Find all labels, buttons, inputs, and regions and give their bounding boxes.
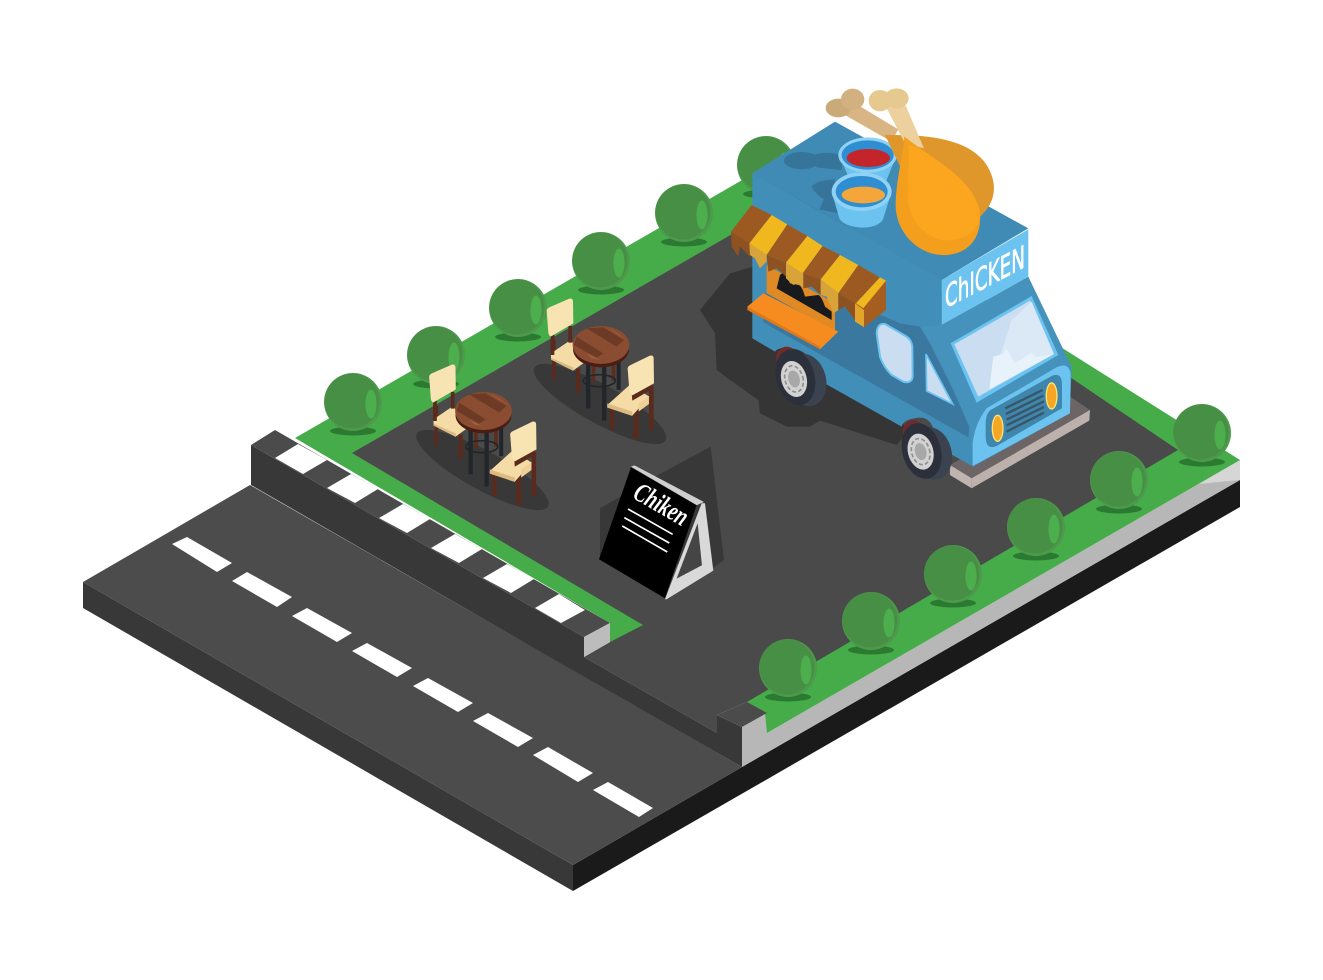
front sauce cup: [832, 172, 892, 228]
roof: [752, 122, 1028, 280]
curb side face: [251, 445, 742, 767]
awning: [731, 205, 886, 327]
awning valance: [731, 232, 750, 257]
sign title: Chiken: [629, 477, 694, 532]
truck ground shadow: [700, 267, 907, 445]
base black front face: [573, 480, 1240, 891]
awning end face: [856, 281, 886, 327]
awning stripes: [731, 205, 772, 243]
front platform: [950, 397, 1090, 488]
front meat: [896, 137, 980, 255]
sign shadow: [600, 447, 724, 568]
green verge shape: [295, 164, 1240, 733]
back row trees: [324, 136, 795, 436]
chicken drumstick: [826, 88, 994, 255]
door window: [926, 354, 953, 404]
road surface: [83, 485, 742, 865]
cafe table set: front: [408, 365, 557, 523]
rear bone: [841, 101, 898, 142]
counter: [747, 293, 838, 349]
sign black face: [599, 467, 697, 598]
front row trees: [759, 404, 1231, 702]
curb white checks: [275, 444, 585, 623]
road left side face: [83, 582, 573, 891]
food truck: [700, 88, 1090, 488]
curb top: [251, 430, 610, 637]
corner curb top: [717, 702, 767, 727]
cafe table set: rear: [525, 299, 675, 457]
road and base slab: [83, 480, 1240, 891]
front face: [920, 277, 1072, 467]
sidewalk sign board: [599, 447, 724, 599]
curb end face: [584, 623, 610, 657]
side window: [877, 324, 913, 382]
truck side body: [752, 173, 973, 467]
rear meat: [885, 135, 994, 217]
rear sauce cup: [838, 137, 897, 183]
parking lot asphalt: [352, 195, 1178, 733]
serving window: [767, 265, 835, 332]
name panel: [942, 229, 1028, 325]
road centre dashes: [172, 537, 653, 817]
front bone: [885, 100, 924, 148]
side dark band: [763, 293, 969, 437]
roof shadows: [784, 152, 842, 213]
curb with checker pattern: [251, 430, 767, 767]
lot raised grey edge: [742, 460, 1240, 767]
rear wheel: [769, 345, 832, 411]
sign board top edge: [631, 465, 704, 505]
windshield: [951, 296, 1058, 403]
sign frame: [665, 503, 713, 599]
front grille panel: [973, 365, 1071, 466]
truck name: ChICKEN: [945, 238, 1025, 316]
sign menu lines: [622, 509, 673, 552]
front wheel: [896, 419, 958, 484]
